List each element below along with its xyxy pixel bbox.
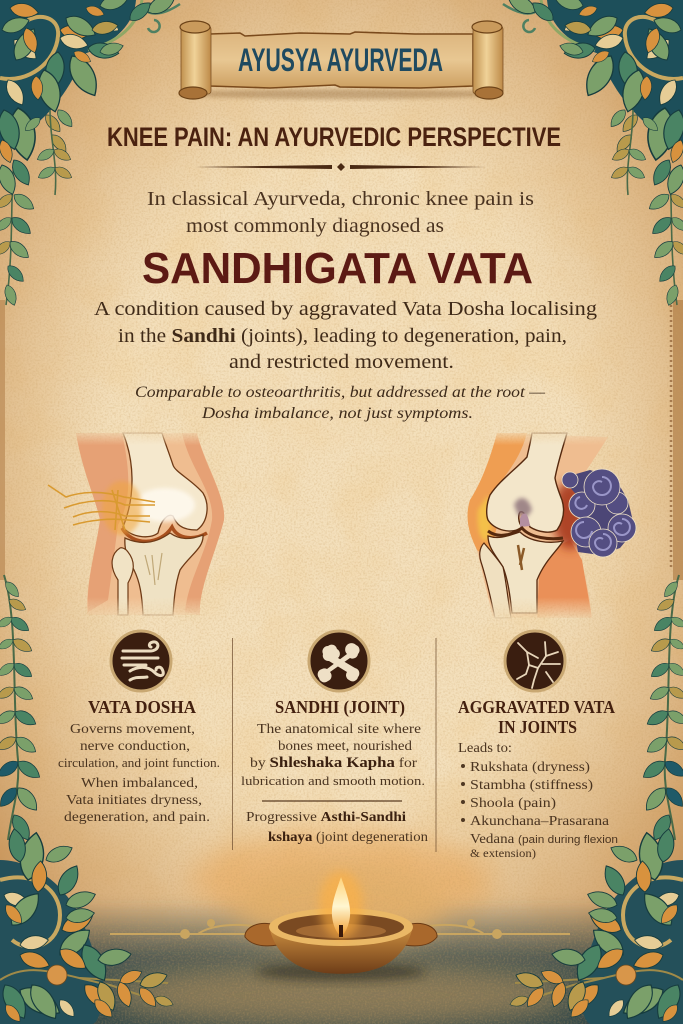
panel: aggravated vata in joints: [458, 631, 618, 860]
body text: The anatomical site where: [257, 722, 421, 737]
panel: vata dosha: [58, 631, 220, 825]
short divider: [262, 800, 402, 802]
panel: sandhi joint: [241, 631, 428, 845]
degeneration note: [246, 810, 428, 845]
intro text block: most commonly diagnosed as: [186, 216, 444, 237]
ornament: top-left foliage corner: [0, 0, 180, 307]
body text: nerve conduction,: [80, 739, 190, 754]
ornament: bottom-right foliage corner: [508, 828, 683, 1024]
column divider lines: [232, 638, 436, 852]
definition text block: and restricted movement.: [229, 351, 454, 373]
body text: lubrication and smooth motion.: [241, 773, 425, 788]
ornament: right side vine: [640, 575, 683, 843]
body text: When imbalanced,: [81, 776, 198, 791]
main term: Sandhigata Vata: SANDHIGATA VATA: [142, 244, 533, 293]
intro text block: [147, 189, 534, 237]
heading: [458, 697, 615, 737]
body text: Governs movement,: [70, 722, 195, 737]
body list: & extension): [470, 846, 536, 860]
body list: Akunchana–Prasarana: [470, 814, 610, 829]
ornament: left side vine: [0, 575, 43, 843]
icon: crossed bones: [309, 631, 369, 691]
degeneration note: kshaya (joint degeneration: [268, 830, 428, 845]
degeneration note: Progressive Asthi-Sandhi: [246, 810, 406, 825]
body text: circulation, and joint function.: [58, 755, 220, 770]
icon: wind: [111, 631, 171, 691]
body text: Vata initiates dryness,: [66, 793, 202, 808]
illustration: degenerated knee with vata clouds: [468, 433, 636, 618]
brand name: AYUSYA AYURVEDA: [238, 42, 443, 78]
italic note: Dosha imbalance, not just symptoms.: [201, 405, 473, 422]
body text: by Shleshaka Kapha for: [250, 755, 417, 771]
vata cloud swirls: [562, 469, 636, 557]
banner: scroll with brand name: [179, 21, 503, 99]
heading: AGGRAVATED VATA: [458, 697, 615, 717]
intro text block: In classical Ayurveda, chronic knee pain is: [147, 189, 534, 210]
heading: knee pain: KNEE PAIN: AN AYURVEDIC PERSPECTIVE: [107, 122, 561, 152]
body list: Vedana (pain during flexion: [470, 832, 618, 847]
body list: Leads to:: [458, 741, 512, 756]
body text: bones meet, nourished: [278, 739, 412, 754]
italic note: Comparable to osteoarthritis, but addressed at the root —: [135, 384, 545, 401]
body list: Stambha (stiffness): [470, 778, 593, 793]
heading: SANDHI (JOINT): [275, 697, 405, 718]
ornament: top-right foliage corner: [503, 0, 683, 307]
heading: IN JOINTS: [498, 717, 577, 737]
icon: cracks: [505, 631, 565, 691]
body list: Rukshata (dryness): [470, 760, 590, 775]
body list: [458, 741, 618, 860]
heading: VATA DOSHA: [88, 697, 196, 717]
body text: [58, 722, 220, 825]
definition text block: A condition caused by aggravated Vata Dosha localising: [94, 298, 597, 320]
oil lamp with flame: [110, 871, 570, 981]
definition text block: [94, 298, 597, 373]
body text: [241, 722, 425, 788]
body list: Shoola (pain): [470, 796, 556, 811]
body text: degeneration, and pain.: [64, 810, 210, 825]
ornament: bottom-left foliage corner: [0, 828, 175, 1024]
definition text block: in the Sandhi (joints), leading to degeneration, pain,: [118, 325, 567, 347]
italic note: [135, 384, 545, 422]
illustration: healthy knee with nerve pain: [48, 433, 224, 615]
divider ornament: [195, 163, 486, 171]
